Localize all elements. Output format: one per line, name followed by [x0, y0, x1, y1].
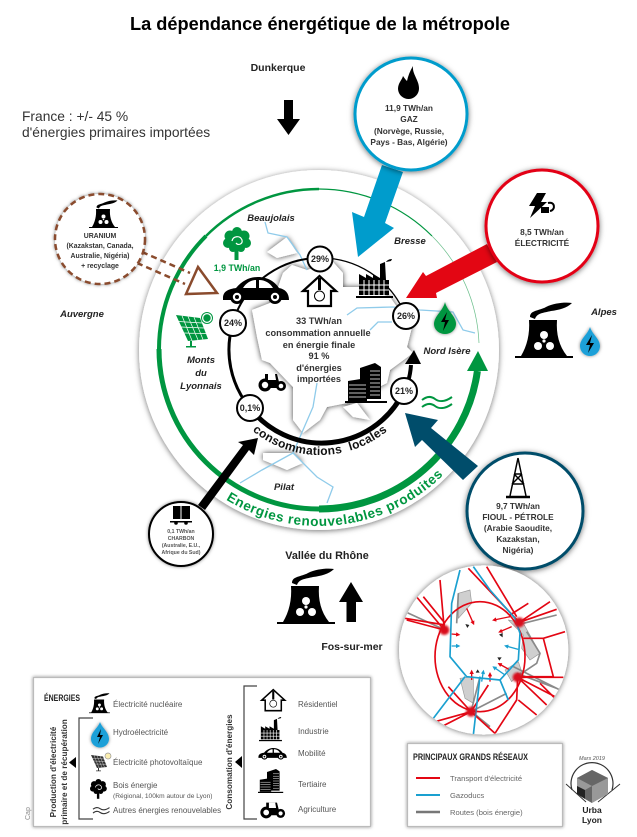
bubble: uranium: URANIUM [84, 233, 117, 240]
arrow: Rhône up [339, 582, 363, 622]
network key: gas: Gazoducs [450, 791, 484, 800]
place labels [59, 213, 617, 493]
legend icon: nuclear [89, 693, 110, 713]
networks heading: PRINCIPAUX GRANDS RÉSEAUX [413, 752, 528, 762]
legend production labels: (Régional, 100km autour de Lyon) [113, 793, 212, 800]
text block: central consumption: importées [297, 374, 341, 384]
place labels: Nord Isère [424, 346, 471, 357]
bubble: uranium: + recyclage [81, 263, 119, 270]
production triangle [69, 757, 76, 768]
text block: France imports: France : +/- 45 % [22, 109, 128, 124]
place labels: Alpes [590, 307, 617, 318]
legend consumption labels: Résidentiel [298, 700, 338, 709]
arrow: oil [405, 413, 478, 480]
place labels: Lyonnais [180, 381, 222, 392]
bubble: oil: Nigéria) [503, 545, 534, 555]
main circle [139, 170, 499, 530]
rivers [240, 222, 475, 503]
bubble: oil: (Arabie Saoudite, [484, 523, 552, 533]
bubble: gas: GAZ [400, 114, 418, 124]
legend production labels: Autres énergies renouvelables [113, 806, 221, 815]
icon: waves [422, 397, 452, 408]
logo: Urba Lyon: Lyon [582, 815, 602, 825]
legend consumption labels [298, 700, 338, 814]
bubble: coal: 0,1 TWh/an [167, 529, 195, 535]
legend icon: solar [91, 753, 111, 771]
icon: nuclear plant Alpes [515, 303, 573, 358]
legend production labels: Électricité photovoltaïque [113, 758, 203, 767]
bubble: uranium: (Kazakstan, Canada, [66, 243, 134, 250]
bubble: gas: 11,9 TWh/an [385, 103, 433, 113]
curved label: consommations locales: consommations locales [254, 427, 386, 455]
black consumption ring [229, 258, 411, 443]
consumption bracket [244, 686, 257, 819]
icon: uranium cooling tower [89, 200, 118, 228]
icon: coal wagon [170, 506, 192, 525]
network key: roads [416, 808, 523, 817]
network key: electricity [416, 774, 522, 783]
label: Fos-sur-mer: Fos-sur-mer [321, 641, 383, 653]
bubble: electricity [486, 170, 598, 282]
text block: central consumption [265, 316, 371, 384]
text block: France imports: d'énergies primaires importées [22, 125, 210, 140]
legend: energies [34, 678, 370, 826]
legend consumption labels: Agriculture [298, 805, 337, 814]
text block: central consumption: consommation annuelle [265, 328, 371, 338]
legend consumption labels: Tertiaire [298, 780, 327, 789]
legend heading: ÉNERGIES [44, 693, 80, 704]
arrow: electricity [406, 244, 497, 298]
credit: Cap: Cap [25, 807, 32, 820]
logo: Urba Lyon: Urba [582, 805, 602, 815]
title: La dépendance énergétique de la métropole [130, 14, 510, 34]
bubble: uranium: Australie, Nigéria) [71, 253, 129, 260]
arrow: gas [352, 165, 403, 257]
arrow: coal [198, 438, 258, 510]
legend icon: tree [90, 779, 107, 799]
arrow: uranium dashed [137, 252, 217, 294]
percentage badges: 0,1% [240, 403, 260, 413]
text block: central consumption: 33 TWh/an [296, 316, 342, 326]
bubble: coal [149, 502, 213, 566]
icon: oil derrick [506, 458, 530, 497]
consumption triangle [235, 756, 242, 768]
legend: networks [408, 744, 562, 826]
roads [405, 593, 560, 727]
icon: office buildings [345, 363, 387, 403]
legend icon: tractor [260, 803, 285, 818]
bubble: coal: Afrique du Sud) [162, 550, 201, 556]
place labels: Monts [187, 355, 215, 366]
label: Dunkerque: Dunkerque [251, 62, 306, 74]
gas [433, 567, 520, 735]
production vertical label [49, 719, 69, 825]
bubble: oil [467, 453, 583, 569]
place labels: Bresse [394, 236, 427, 247]
icon: tree [223, 227, 251, 260]
logo: Urba Lyon: Mars 2019 [579, 756, 605, 762]
legend icon: waves [93, 807, 110, 814]
icon: car [223, 277, 289, 304]
production vertical label: primaire et de récupération [60, 719, 69, 825]
legend production labels: Bois énergie [113, 781, 158, 790]
place labels: Beaujolais [247, 213, 295, 224]
production bracket [79, 718, 93, 819]
percentage badges: 21% [395, 386, 413, 396]
bubble: gas: (Norvège, Russie, [374, 126, 444, 136]
text block: France imports [22, 109, 210, 140]
bubble: oil: FIOUL - PÉTROLE [482, 512, 554, 522]
text block: central consumption: 91 % [309, 351, 329, 361]
icon: solar panel [176, 315, 208, 348]
bubble: oil: 9,7 TWh/an [496, 501, 540, 511]
network key: gas [416, 791, 484, 800]
bubble: electricity: ÉLECTRICITÉ [515, 238, 570, 248]
arrow: consumption ring head [405, 350, 421, 364]
icon: lightning and plug [529, 193, 554, 218]
icon: flame [398, 66, 419, 99]
text block: central consumption: en énergie finale [283, 340, 355, 350]
logo: Urba Lyon [566, 756, 620, 825]
text block: central consumption: d'énergies [296, 363, 342, 373]
green ring: renewable energy [159, 189, 479, 509]
label: 1,9 TWh/an: 1,9 TWh/an [214, 263, 260, 273]
legend icon: factory [259, 717, 282, 741]
icon: nuclear plant Vallée du Rhône [277, 569, 335, 624]
network key: roads: Routes (bois énergie) [450, 808, 523, 817]
place labels: Pilat [274, 482, 295, 493]
small black arrows [465, 624, 503, 673]
arrow: Dunkerque down [277, 100, 300, 135]
electricity [405, 567, 565, 733]
curved label: Energies renouvelables produites: Energies renouvelables produites [226, 471, 442, 526]
icon: green water drop [434, 302, 456, 334]
icon: factory [356, 259, 393, 298]
legend consumption labels: Mobilité [298, 749, 326, 758]
bubble: uranium [55, 194, 145, 284]
legend icon: building [258, 769, 283, 793]
legend production labels: Électricité nucléaire [113, 700, 183, 709]
label: Vallée du Rhône: Vallée du Rhône [285, 550, 369, 562]
percentage badges [220, 246, 419, 421]
percentage badges: 24% [224, 318, 242, 328]
bubble: oil: Kazakstan, [496, 534, 540, 544]
bubble: gas: Pays - Bas, Algérie) [370, 137, 448, 147]
bubble: coal: (Australie, E.U., [162, 543, 201, 549]
territory fragments [458, 590, 540, 703]
legend icon: car [258, 748, 287, 760]
chart: network map [399, 565, 568, 735]
percentage badges: 29% [311, 254, 329, 264]
consumption vertical label: Consomation d'énergies [225, 714, 234, 810]
bubble: electricity: 8,5 TWh/an [520, 227, 564, 237]
legend icon: hydro drop [91, 722, 109, 748]
icon: blue drop Alpes [580, 327, 600, 356]
network key: electricity: Transport d'électricité [450, 774, 522, 783]
percentage badges: 26% [397, 311, 415, 321]
bubble: coal: CHARBON [168, 536, 195, 542]
production vertical label: Production d'électricité [49, 726, 58, 817]
bubble: gas [355, 58, 467, 170]
icon: house [303, 276, 336, 306]
legend production labels [113, 700, 221, 815]
arrow: green ring head [467, 351, 488, 371]
legend icon: house [262, 690, 285, 711]
legend consumption labels: Industrie [298, 727, 329, 736]
metropolitan territory [252, 237, 413, 470]
legend production labels: Hydroélectricité [113, 728, 169, 737]
hubs [439, 617, 524, 717]
icon: tractor [258, 374, 286, 392]
icon: sun [202, 312, 212, 324]
place labels: Auvergne [59, 309, 105, 320]
place labels: du [195, 368, 207, 379]
